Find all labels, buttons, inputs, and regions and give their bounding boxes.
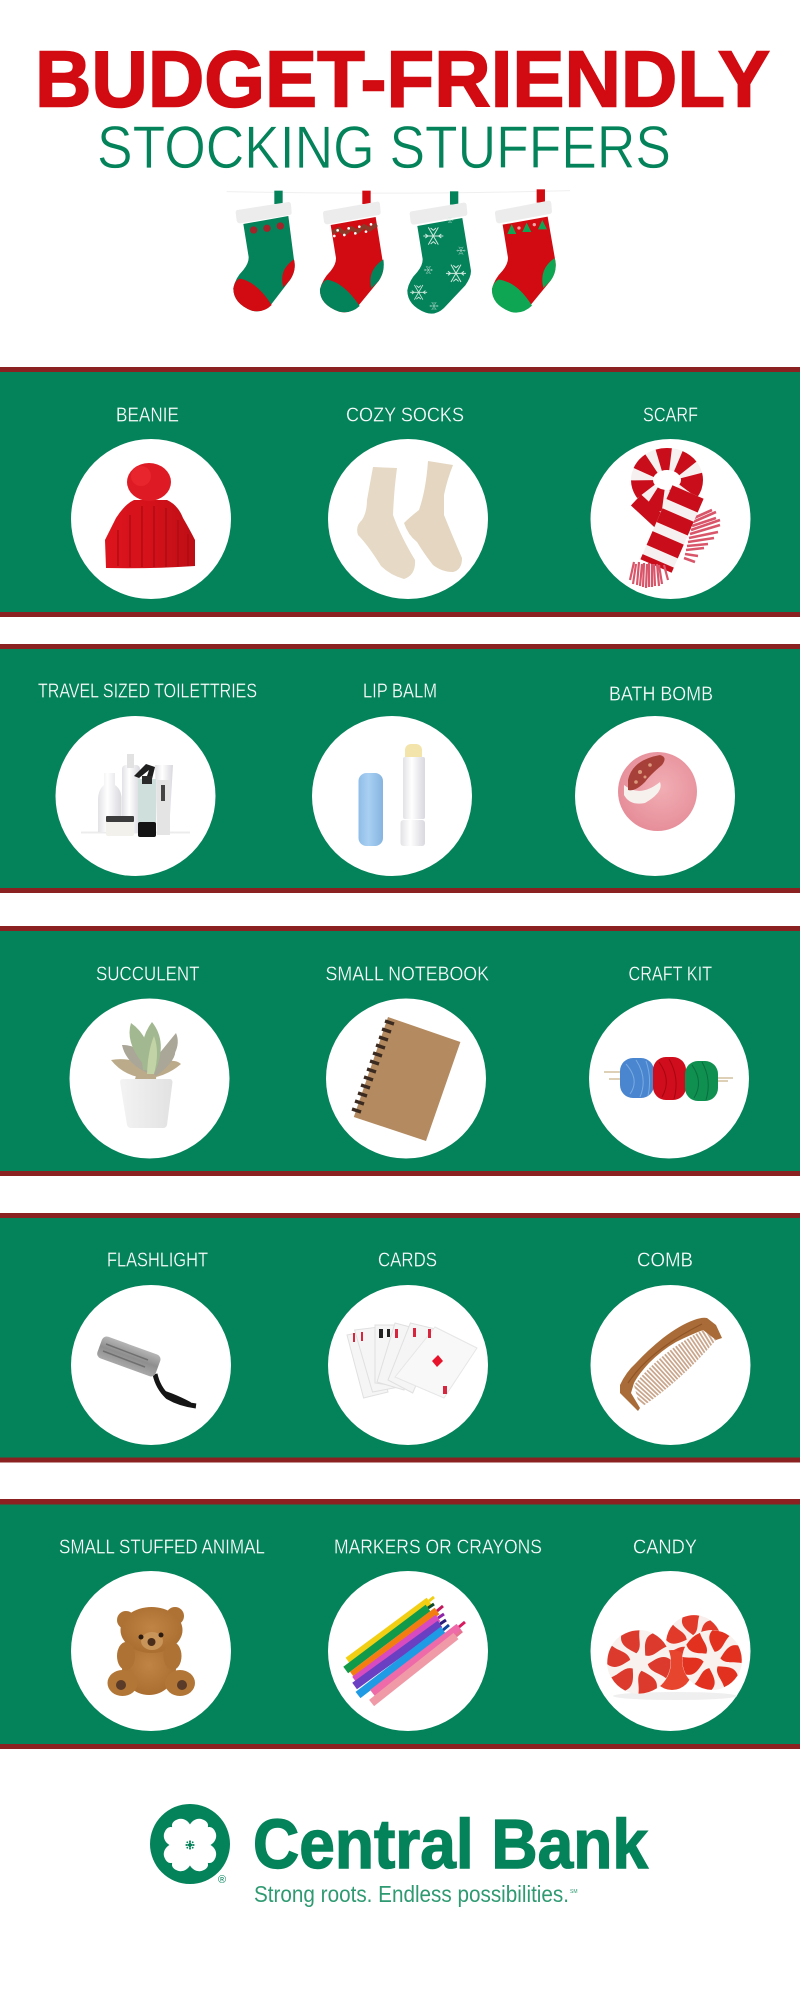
label: lip balm: LIP BALM <box>363 680 437 702</box>
icon: cards <box>347 1323 477 1398</box>
label: small notebook: SMALL NOTEBOOK <box>326 964 490 986</box>
label: flashlight: FLASHLIGHT <box>107 1250 208 1272</box>
panel: row 1 <box>0 367 800 617</box>
logo mark: dogwood flower <box>150 1804 230 1884</box>
icon: candy <box>600 1615 754 1701</box>
label: comb: COMB <box>637 1250 693 1272</box>
icon: markers <box>346 1597 465 1703</box>
circle: notebook <box>326 998 486 1158</box>
label: markers or crayons: MARKERS OR CRAYONS <box>334 1536 542 1558</box>
stocking 4: red with trees <box>492 189 556 313</box>
circle: lip balm <box>312 716 472 876</box>
icon: small notebook <box>352 1017 460 1141</box>
circle: craft kit <box>589 998 749 1158</box>
icon: flashlight <box>96 1335 196 1406</box>
icon: bath bomb <box>618 752 697 831</box>
band <box>0 644 800 893</box>
registered mark: ® <box>218 1874 226 1886</box>
icon: cozy socks <box>357 461 462 579</box>
icon: succulent <box>111 1022 181 1128</box>
panel: row 5 <box>0 1499 800 1749</box>
icon: scarf <box>630 459 720 588</box>
label: bath bomb: BATH BOMB <box>609 684 713 706</box>
circle: succulent <box>70 998 230 1158</box>
label: candy: CANDY <box>633 1536 697 1558</box>
stocking 1: green <box>233 191 295 311</box>
label: toiletries: TRAVEL SIZED TOILETTRIES <box>38 680 257 702</box>
service mark: SM <box>570 1889 578 1895</box>
label: cards: CARDS <box>378 1250 437 1272</box>
label: craft kit: CRAFT KIT <box>628 964 712 986</box>
panel: row 2 <box>0 644 800 893</box>
circle: candy <box>590 1571 750 1731</box>
circle: markers <box>328 1571 488 1731</box>
icon: craft kit <box>604 1057 733 1101</box>
circle: comb <box>590 1285 750 1445</box>
band <box>0 926 800 1176</box>
circle: beanie <box>71 439 231 599</box>
icon: teddy bear <box>108 1607 195 1696</box>
illustration: hanging stockings <box>227 189 570 314</box>
tagline: Strong roots. Endless possibilities. <box>254 1881 569 1907</box>
icon: lip balm <box>358 744 425 846</box>
circle: socks <box>328 439 488 599</box>
circle: toiletries <box>56 716 216 876</box>
icon: toiletries <box>81 754 190 837</box>
band <box>0 1499 800 1749</box>
title: budget-friendly: BUDGET-FRIENDLY <box>35 34 770 124</box>
panel: row 4 <box>0 1213 800 1462</box>
band <box>0 367 800 617</box>
stocking 2: red <box>320 191 384 312</box>
circle: scarf <box>590 439 750 599</box>
circle: flashlight <box>71 1285 231 1445</box>
circle: cards <box>328 1285 488 1445</box>
band <box>0 1213 800 1462</box>
icon: beanie <box>105 463 195 568</box>
circle: bath bomb <box>575 716 735 876</box>
circle: stuffed animal <box>71 1571 231 1731</box>
label: succulent: SUCCULENT <box>96 964 200 986</box>
icon: comb <box>620 1318 722 1411</box>
panel: row 3 <box>0 926 800 1176</box>
wordmark: Central Bank <box>253 1805 648 1883</box>
label: cozy socks: COZY SOCKS <box>346 404 464 426</box>
label: scarf: SCARF <box>643 404 698 426</box>
label: beanie: BEANIE <box>116 404 179 426</box>
subtitle: stocking stuffers: STOCKING STUFFERS <box>97 114 671 181</box>
stocking 3: snowflakes <box>407 191 471 314</box>
logo: central bank <box>150 1804 648 1907</box>
label: small stuffed animal: SMALL STUFFED ANIMAL <box>59 1536 265 1558</box>
